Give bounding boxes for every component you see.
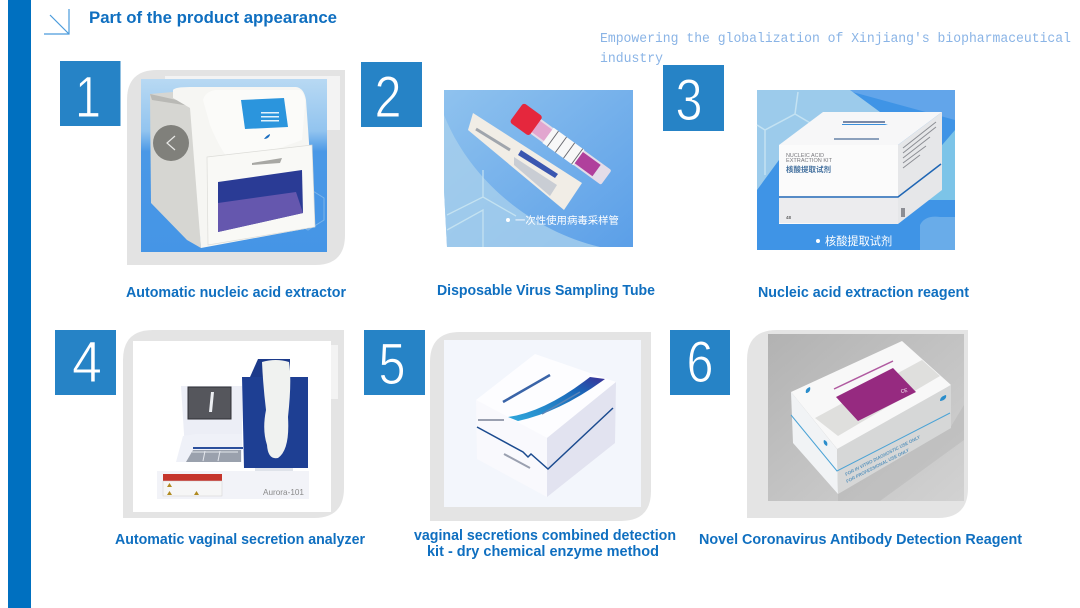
panel 6: antibody detection reagent	[747, 330, 968, 518]
reagent box: NUCLEIC ACID	[786, 153, 824, 159]
badge 5: 5	[378, 332, 406, 397]
panel 3: extraction reagent image	[757, 90, 955, 250]
panel 2: sampling tube image	[444, 90, 633, 247]
badge 3: 3	[676, 68, 702, 133]
badge 3	[663, 65, 724, 133]
detection kit box	[476, 354, 616, 497]
reagent box: FOR IN VITRO DIAGNOSTIC USE ONLY	[844, 434, 922, 477]
reagent box: 48	[786, 215, 792, 220]
reagent box: 核酸提取试剂	[786, 164, 831, 174]
icon: corner arrow	[44, 9, 69, 34]
sampling tube	[509, 103, 613, 187]
reagent box	[779, 112, 942, 224]
caption 3: Nucleic acid extraction reagent	[758, 285, 969, 301]
analyzer instrument	[157, 359, 309, 499]
badge 5	[364, 330, 425, 397]
icon: extractor screen	[241, 98, 288, 129]
badge 4	[55, 330, 116, 395]
sidebar bar	[8, 0, 31, 608]
icon: carousel back button	[153, 125, 189, 161]
panel 1: nucleic acid extractor	[127, 70, 345, 265]
caption 1: Automatic nucleic acid extractor	[126, 285, 346, 301]
caption 6: Novel Coronavirus Antibody Detection Reagent	[699, 532, 1022, 548]
image label: 一次性使用病毒采样管	[515, 214, 619, 227]
caption 4: Automatic vaginal secretion analyzer	[115, 532, 365, 548]
tagline text	[600, 32, 1071, 67]
badge 1: 1	[75, 65, 101, 130]
tagline text: industry	[600, 52, 663, 67]
image label: 核酸提取试剂	[825, 234, 892, 248]
caption 5	[414, 528, 676, 560]
badge 2: 2	[374, 65, 402, 130]
badge 2	[361, 62, 422, 130]
swab package	[468, 113, 582, 210]
badge 6: 6	[686, 330, 714, 395]
reagent box: FOR PROFESSIONAL USE ONLY	[845, 447, 911, 484]
caption 5: vaginal secretions combined detection	[414, 528, 676, 544]
badge 6	[670, 330, 730, 395]
caption 5: kit - dry chemical enzyme method	[427, 544, 659, 560]
reagent box: CE	[900, 388, 909, 395]
title: Part of the product appearance	[89, 9, 337, 27]
panel 4: vaginal secretion analyzer	[123, 330, 344, 518]
analyzer instrument: Aurora-101	[263, 487, 304, 497]
tagline text: Empowering the globalization of Xinjiang's biopharmaceutical	[600, 32, 1071, 47]
badge 4: 4	[72, 330, 102, 395]
reagent box: EXTRACTION KIT	[786, 158, 832, 164]
caption 2: Disposable Virus Sampling Tube	[437, 283, 655, 299]
badge 1	[60, 61, 120, 130]
panel 5: combined detection kit	[430, 332, 651, 521]
reagent box	[791, 341, 964, 501]
